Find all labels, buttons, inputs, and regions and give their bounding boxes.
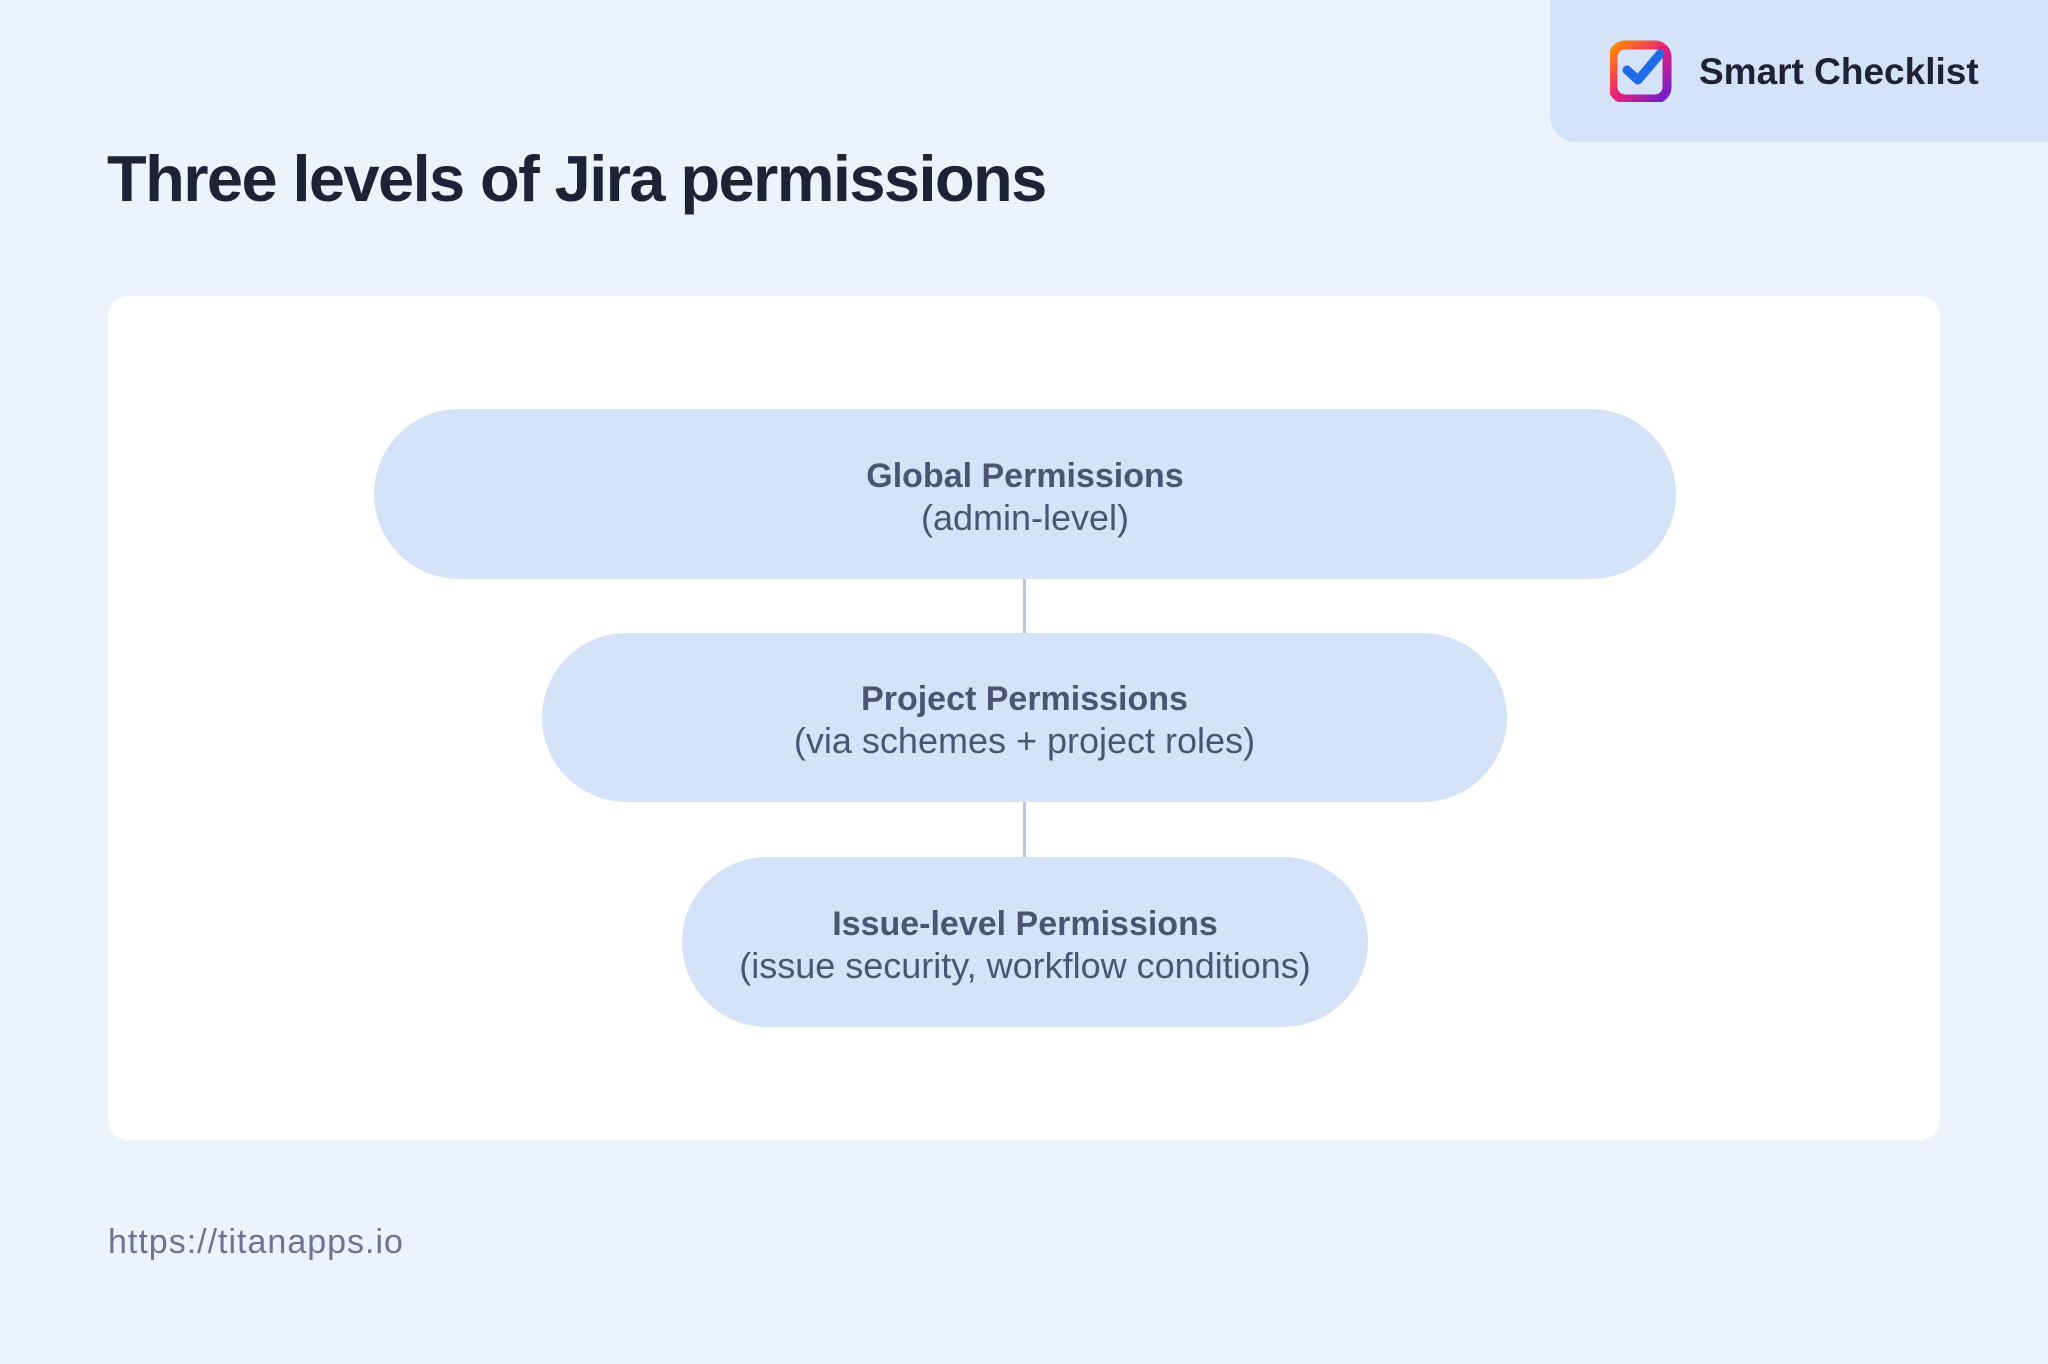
footer url: https://titanapps.io [108, 1223, 404, 1261]
box: issue-level permissions [682, 857, 1368, 1027]
box: project permissions: (via schemes + project roles) [794, 720, 1255, 761]
box: global permissions [374, 409, 1676, 579]
panel: diagram [108, 296, 1940, 1140]
box: global permissions: (admin-level) [921, 496, 1129, 538]
title: Three levels of Jira permissions [107, 142, 1046, 215]
connector 2 [1023, 802, 1026, 857]
connector 1 [1023, 579, 1026, 633]
box: issue-level permissions: (issue security, workflow conditions) [739, 944, 1311, 986]
icon: checklist logo [1610, 40, 1672, 102]
box: issue-level permissions: Issue-level Permissions [832, 904, 1218, 942]
brand name: Smart Checklist [1699, 51, 1979, 92]
box: global permissions: Global Permissions [866, 456, 1184, 494]
logo tab [1550, 0, 2048, 142]
box: project permissions [542, 633, 1507, 802]
box: project permissions: Project Permissions [861, 680, 1188, 718]
